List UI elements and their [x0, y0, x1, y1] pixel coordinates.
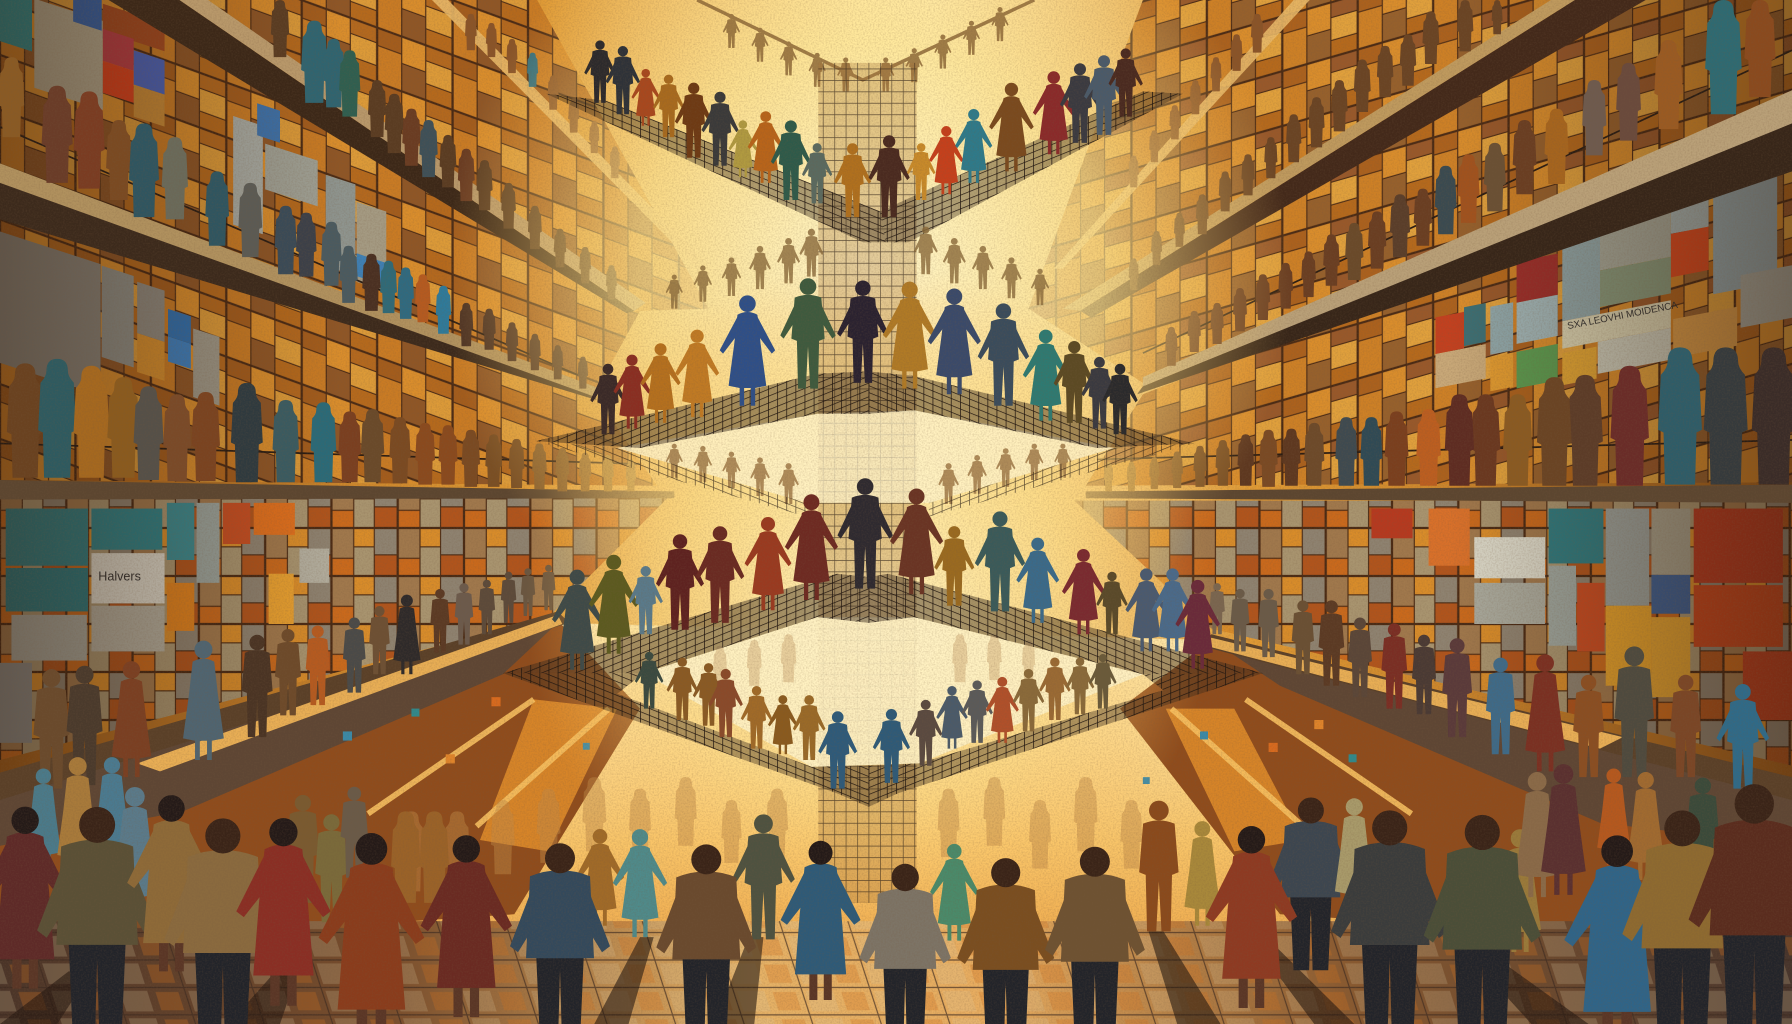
platform 3 hollow light: [643, 617, 1143, 767]
ledges: [0, 0, 1792, 800]
wall tiles lower right: [1371, 509, 1792, 720]
distant rows above platform 2: [666, 227, 1049, 309]
speckled mosaic: [343, 697, 1357, 784]
wall text right: SXA LEOVHI MOIDENCA: [1566, 300, 1679, 332]
crowd: left upper wall: [0, 57, 588, 389]
panel: lower pit floor: [0, 623, 1792, 1024]
faint crowd in pit: [399, 777, 1142, 891]
wall tiles upper left: [0, 0, 165, 130]
panel: right walls: [1029, 0, 1792, 766]
ring of people 4 below platform 3: [635, 652, 1117, 789]
crowd: left top ledge: [271, 0, 617, 299]
crowd: left lower walkway: [33, 565, 555, 789]
wall text left: Halvers: [98, 570, 141, 584]
crowd: right lower walkway: [1209, 583, 1769, 789]
top distant bridge of people: [697, 0, 1034, 91]
wall tiles lower left: [0, 231, 219, 434]
crowd: upper left far ledge: [465, 14, 620, 178]
pit beams: [368, 699, 1411, 826]
faint crowd inside platform 3: [713, 634, 1035, 689]
central lattice column: [818, 63, 917, 903]
platform 2 hollow light: [617, 410, 1114, 503]
crowd: back row on floor: [26, 757, 1719, 970]
ring of people 3: [552, 478, 1220, 670]
crowd: right upper wall: [1165, 80, 1606, 366]
platform 2: [536, 371, 1194, 517]
wall tiles bottom left: [0, 503, 329, 743]
wall tiles middle left: [233, 95, 391, 293]
crowd: front row holding hands: [0, 784, 1792, 1024]
crowd: right railing row: [1104, 347, 1792, 491]
panel: left walls: [0, 0, 709, 760]
crowd: right top ledge: [1129, 0, 1776, 290]
crowd: right far ledge: [1129, 14, 1263, 187]
platform 3: [503, 574, 1263, 807]
crowd: left railing row: [7, 359, 636, 491]
floor: [0, 921, 1792, 1024]
wall tiles upper right: [1435, 162, 1792, 410]
ring of people 1: [584, 40, 1143, 217]
platform 1: [546, 91, 1183, 242]
distant rows below platform 2: [666, 444, 1071, 504]
ring of people 2: [590, 278, 1138, 434]
long shadows on floor: [0, 931, 1589, 1024]
wall edge shading: [0, 0, 1792, 800]
